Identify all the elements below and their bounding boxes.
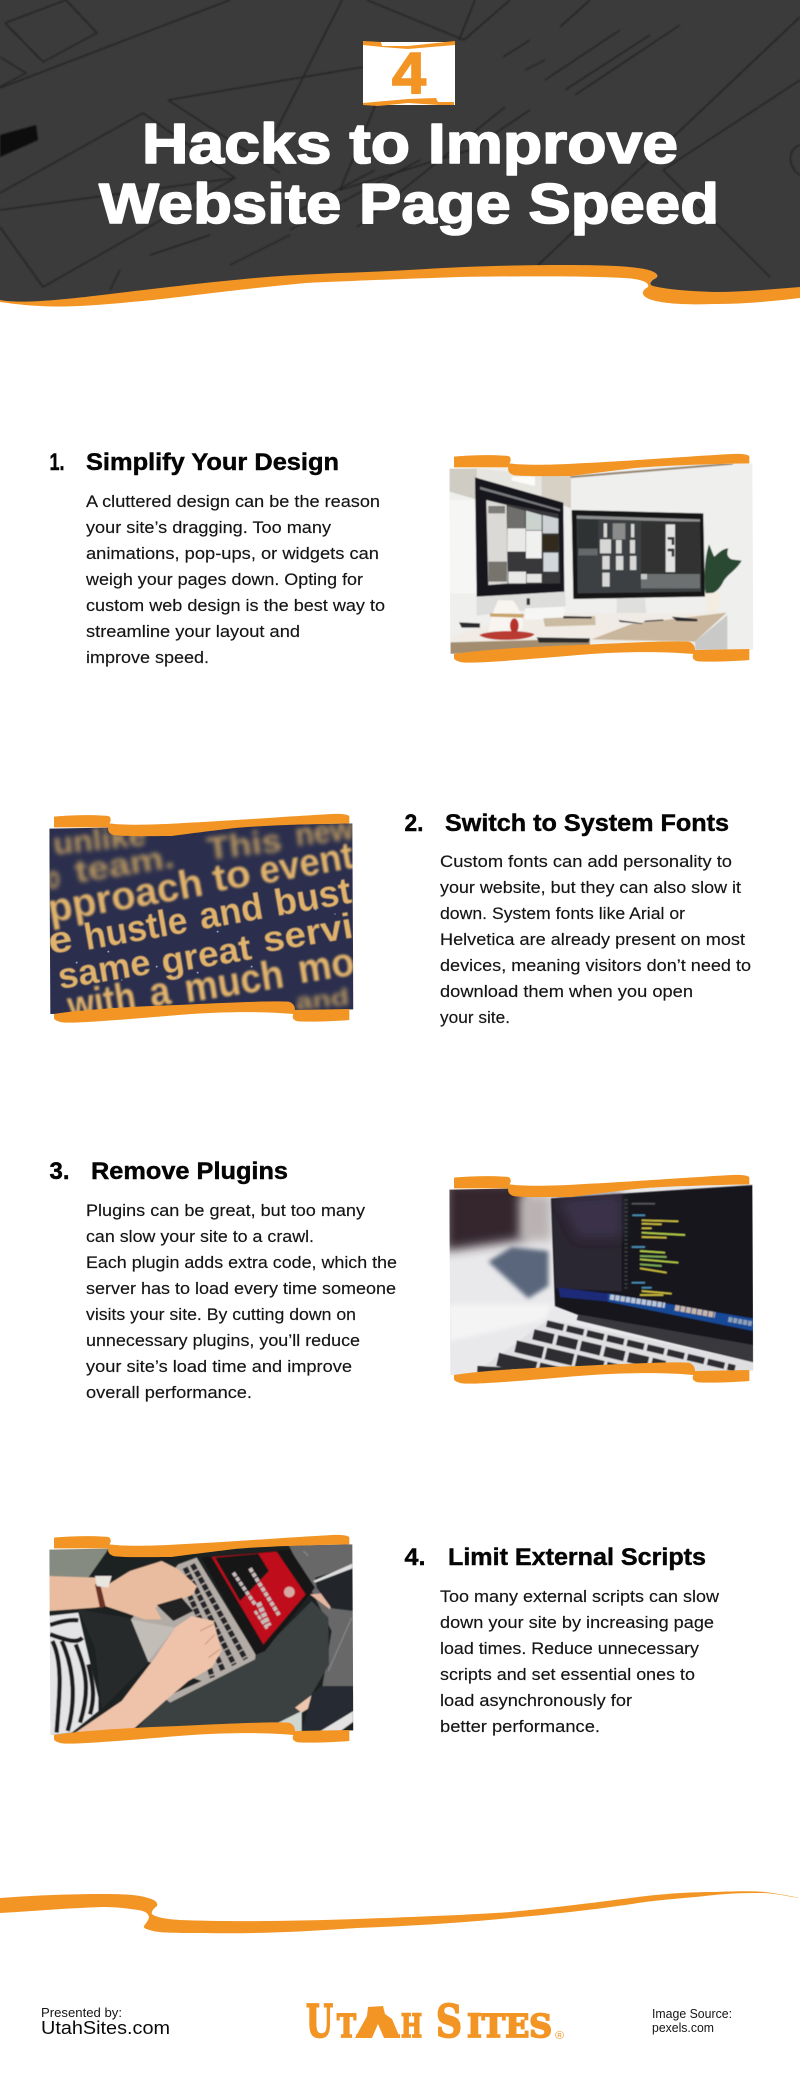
logo: Utah Sites: S — [436, 1995, 462, 2048]
right monitor — [616, 598, 646, 613]
body text 3: visits your site. By cutting down on — [86, 1306, 356, 1324]
presented by: Presented by: — [41, 2005, 122, 2020]
photo: blurred printed text: o — [47, 859, 60, 895]
header orange wave — [0, 265, 800, 307]
desk — [450, 613, 727, 642]
footer — [41, 1995, 732, 2048]
body text 3: overall performance. — [86, 1384, 252, 1402]
heading 1: Simplify Your Design — [86, 449, 339, 476]
body text 3: unnecessary plugins, you’ll reduce — [86, 1332, 360, 1350]
body text 3: Each plugin adds extra code, which the — [86, 1254, 397, 1272]
photo: blurred printed text: hustle — [81, 898, 190, 958]
photo: blurred printed text: great — [158, 926, 254, 982]
photo: laptop with code on screen — [445, 1181, 758, 1378]
body text 1: weigh your pages down. Opting for — [85, 571, 364, 589]
laptop screen — [202, 1549, 315, 1655]
photo: blurred printed text: much — [181, 950, 287, 1012]
title: Website Page Speed — [99, 172, 719, 236]
body text 4 — [440, 1588, 719, 1736]
photo with frame: hands typing on a laptop — [45, 1535, 358, 1744]
body text 1: custom web design is the best way to — [86, 597, 385, 615]
body text 2: down. System fonts like Arial or — [440, 905, 686, 923]
photo: blurred printed text: with — [63, 973, 139, 1029]
section 4: Limit External Scripts — [45, 1535, 719, 1744]
background tones — [49, 1548, 108, 1578]
body text 3 — [86, 1202, 397, 1402]
laptop body — [468, 1319, 753, 1378]
heading 3: 3. — [50, 1158, 70, 1185]
photo: blurred printed text: and — [294, 984, 350, 1015]
body text 1: improve speed. — [86, 649, 209, 667]
striped shirt — [48, 1613, 98, 1736]
body text 1 — [85, 493, 385, 667]
body text 2: your site. — [440, 1009, 510, 1027]
body text 3: server has to load every time someone — [86, 1280, 396, 1298]
photo: blurred printed text: bust — [271, 869, 354, 924]
header banner — [0, 0, 800, 310]
orange frame 1 — [454, 454, 749, 663]
body text 1: animations, pop-ups, or widgets can — [86, 545, 379, 563]
body text 4: better performance. — [440, 1718, 600, 1736]
body text 3: can slow your site to a crawl. — [86, 1228, 314, 1246]
orange frame 4 — [54, 1535, 349, 1744]
body text 2: devices, meaning visitors don’t need to — [440, 957, 751, 975]
keyboard keys — [185, 1564, 246, 1678]
heading 4: 4. — [404, 1544, 426, 1571]
lucky cat — [488, 600, 523, 635]
body text 3: Plugins can be great, but too many — [86, 1202, 366, 1220]
title — [99, 112, 719, 236]
body text 1: A cluttered design can be the reason — [86, 493, 380, 511]
photo: blurred printed text: to — [209, 852, 254, 901]
footer orange wave — [0, 1891, 800, 1933]
title: Hacks to Improve — [142, 112, 678, 176]
body text 2: Custom fonts can add personality to — [440, 853, 732, 871]
photo: hands typing on a laptop — [45, 1541, 358, 1738]
presented by: UtahSites.com — [41, 2017, 170, 2038]
body text 4: load asynchronously for — [440, 1692, 633, 1710]
hinge — [577, 1314, 753, 1362]
image source: pexels.com — [652, 2021, 714, 2035]
body text 4: load times. Reduce unnecessary — [440, 1640, 700, 1658]
photo: blurred printed text: team. — [72, 838, 177, 890]
body text 1: your site’s dragging. Too many — [86, 519, 332, 537]
logo: Utah Sites: ® — [555, 2030, 564, 2042]
photo: blurred printed text: event — [256, 834, 357, 893]
heading 2: Switch to System Fonts — [445, 810, 729, 837]
photo: blurred printed text: pproach — [44, 861, 206, 931]
body text 2: your website, but they can also slow it — [440, 879, 741, 897]
photo: blurred printed text: servi — [260, 905, 356, 960]
body text 4: down your site by increasing page — [440, 1614, 714, 1632]
photo: blurred printed text: e — [44, 916, 75, 962]
presented by — [41, 2005, 170, 2038]
heading 1: 1. — [50, 449, 64, 476]
body text 4: scripts and set essential ones to — [440, 1666, 695, 1684]
body text 4: Too many external scripts can slow — [440, 1588, 719, 1606]
image source — [652, 2007, 732, 2035]
lower arm and hand — [69, 1616, 222, 1737]
photo: blurred printed text — [49, 823, 354, 1014]
code lines — [626, 1199, 685, 1295]
logo: Utah Sites: U — [306, 1995, 333, 2048]
keyboard keys — [477, 1324, 735, 1374]
number badge: 4 — [392, 41, 426, 106]
upper arm and hand — [48, 1561, 197, 1619]
torso and jeans — [78, 1609, 149, 1709]
photo: blurred printed text: This — [205, 822, 284, 867]
screen — [551, 1185, 753, 1346]
section 3: Remove Plugins — [50, 1158, 758, 1402]
body text 2: download them when you open — [440, 983, 693, 1001]
section 1: Simplify Your Design — [50, 449, 758, 667]
heading 2: 2. — [404, 810, 424, 837]
body text 2: Helvetica are already present on most — [440, 931, 745, 949]
photo with frame: desk with two monitors — [445, 454, 758, 663]
number badge — [363, 41, 455, 106]
heading 3: Remove Plugins — [91, 1158, 288, 1185]
photo: blurred printed text: a — [146, 967, 174, 1016]
shoes and ankles — [310, 1593, 332, 1609]
section 2: Switch to System Fonts — [44, 810, 751, 1029]
body text 2 — [440, 853, 751, 1027]
photo: desk with two monitors — [445, 460, 758, 657]
photo: blurred printed text: new — [293, 810, 356, 853]
photo: blurred printed text: unlike — [52, 818, 148, 862]
plant and pot — [705, 544, 742, 593]
logo: Utah Sites: ITES — [467, 2007, 552, 2045]
image source: Image Source: — [652, 2007, 732, 2021]
taskbar — [558, 1288, 608, 1302]
body text 1: streamline your layout and — [86, 623, 300, 641]
photo: blurred printed text: same — [55, 941, 153, 997]
body text 3: your site’s load time and improve — [86, 1358, 352, 1376]
orange frame 3 — [454, 1175, 749, 1384]
logo: Utah Sites — [306, 1995, 564, 2048]
laptop base — [131, 1558, 256, 1703]
heading 4: Limit External Scripts — [448, 1544, 706, 1571]
logo: Utah Sites: A — [356, 2007, 400, 2045]
logo: Utah Sites: T — [337, 2007, 356, 2045]
orange frame 2 — [54, 814, 349, 1023]
header background photo: wireframe sketches — [0, 0, 800, 310]
photo: blurred printed text: and — [196, 885, 266, 937]
left monitor — [477, 592, 566, 616]
desk items — [525, 607, 565, 620]
photo with frame: laptop with code — [445, 1175, 758, 1384]
photo: blurred printed text: mo — [294, 938, 357, 992]
photo with frame: blurred printed text — [44, 810, 358, 1029]
logo: Utah Sites: H — [401, 2007, 422, 2045]
